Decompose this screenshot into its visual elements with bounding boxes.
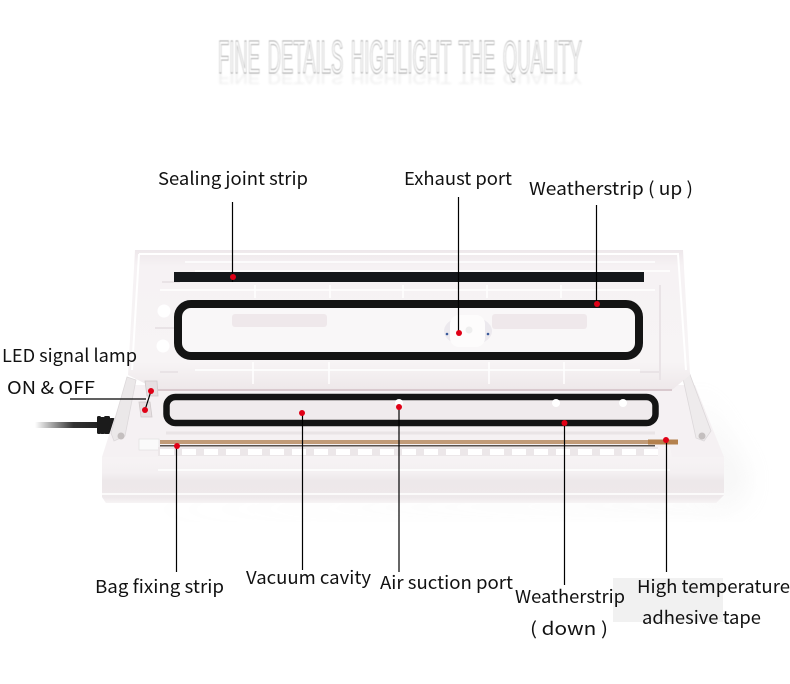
hinge: right <box>682 372 711 441</box>
weatherstrip up gasket <box>178 304 639 356</box>
LED lamps <box>139 381 158 417</box>
sealing joint strip <box>174 272 644 282</box>
open lid <box>128 250 690 390</box>
bag fixing strip and heat tape <box>139 439 678 456</box>
leader lines <box>70 197 666 585</box>
label: air suction port: Air suction port <box>380 569 513 595</box>
exhaust port fitting <box>444 315 492 347</box>
label: weatherstrip down: ( down ) <box>530 615 608 641</box>
label: exhaust port: Exhaust port <box>404 165 512 191</box>
label: sealing joint strip: Sealing joint strip <box>158 165 308 191</box>
red marker dots <box>142 274 669 449</box>
label: weatherstrip up: Weatherstrip ( up ) <box>529 175 693 201</box>
product shadow <box>110 390 745 510</box>
hinge: left <box>111 377 136 441</box>
air suction holes <box>395 399 627 407</box>
label: bag fixing strip: Bag fixing strip <box>95 573 224 599</box>
grey patch behind label <box>613 578 723 622</box>
label: high temperature adhesive tape: adhesive tape <box>642 604 761 630</box>
label: LED signal lamp: LED signal lamp <box>2 342 137 368</box>
label: vacuum cavity: Vacuum cavity <box>246 564 372 590</box>
base unit <box>102 385 724 503</box>
power cord <box>35 416 115 434</box>
weatherstrip down gasket <box>166 397 656 423</box>
label: weatherstrip down: Weatherstrip <box>515 583 625 609</box>
label: weatherstrip down <box>515 583 625 641</box>
lid recesses <box>232 314 587 329</box>
product: vacuum sealer <box>35 250 745 510</box>
label: high temperature adhesive tape: High temperature <box>637 573 790 599</box>
label: high temperature adhesive tape <box>637 573 790 630</box>
label: on and off: ON & OFF <box>7 374 95 400</box>
